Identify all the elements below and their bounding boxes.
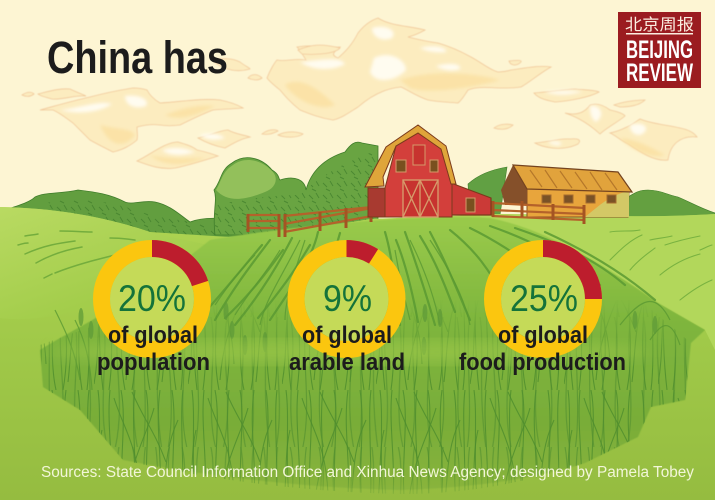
- title: China has: [47, 32, 228, 83]
- left hill: [0, 207, 210, 319]
- barn doors: [403, 180, 438, 217]
- wheat light band behind labels: [50, 340, 650, 364]
- central field: [40, 217, 705, 490]
- donut: 25% of global food production: of global: [498, 322, 588, 349]
- shed wall: [527, 189, 629, 217]
- right hill: [480, 214, 715, 350]
- fence right: [492, 201, 585, 224]
- logo: Beijing Review: [618, 12, 701, 88]
- barn side wall: [368, 188, 386, 217]
- wheat ears: [78, 302, 658, 355]
- donut: 9% of global arable land: of global: [302, 322, 392, 349]
- wheat field texture: [40, 300, 691, 494]
- barn: [365, 125, 491, 217]
- fence left: [247, 207, 372, 237]
- cloud highlights: [60, 27, 646, 155]
- barn roof: [365, 125, 456, 187]
- donut: 20% of global population: of global: [108, 322, 198, 349]
- tree highlight: [216, 160, 276, 199]
- barn lean-to: [451, 183, 491, 215]
- donut: 25% of global food production: [459, 248, 626, 376]
- donut: 9% of global arable land: arable land: [289, 349, 405, 376]
- donut: 20% of global population: population: [97, 349, 210, 376]
- distant tree line left: [0, 190, 250, 245]
- shed roof ribs: [530, 170, 617, 190]
- right hill grass strokes: [610, 230, 712, 300]
- cloud shading: [100, 73, 665, 164]
- large tree cluster: [214, 142, 378, 235]
- barn windows: [396, 145, 475, 212]
- ground: [0, 207, 715, 500]
- field furrows: [205, 226, 655, 325]
- clouds: [22, 18, 697, 168]
- donut: 20% of global population: [97, 248, 210, 376]
- left hill grass strokes: [18, 231, 135, 278]
- shed windows: [542, 195, 616, 203]
- shed gable: [501, 165, 527, 205]
- shed: [501, 165, 632, 217]
- sources credit: Sources: State Council Information Office and Xinhua News Agency; designed by Pamela Tobey: [41, 464, 694, 481]
- donut: 20% of global population: 20%: [118, 278, 186, 319]
- tree leaf shading: [40, 150, 378, 240]
- shed roof: [513, 165, 632, 192]
- donut: 25% of global food production: 25%: [510, 278, 578, 319]
- donut: 25% of global food production: food production: [459, 349, 626, 376]
- donut: 9% of global arable land: 9%: [323, 278, 372, 319]
- logo: Beijing Review: 北京周报: [625, 16, 694, 34]
- barn front: [385, 133, 452, 217]
- distant hill right: [628, 190, 715, 232]
- donut: 9% of global arable land: [289, 248, 405, 376]
- shed pale wall: [585, 191, 629, 217]
- tree behind shed: [468, 167, 507, 215]
- wheat stalks upper: [55, 240, 680, 390]
